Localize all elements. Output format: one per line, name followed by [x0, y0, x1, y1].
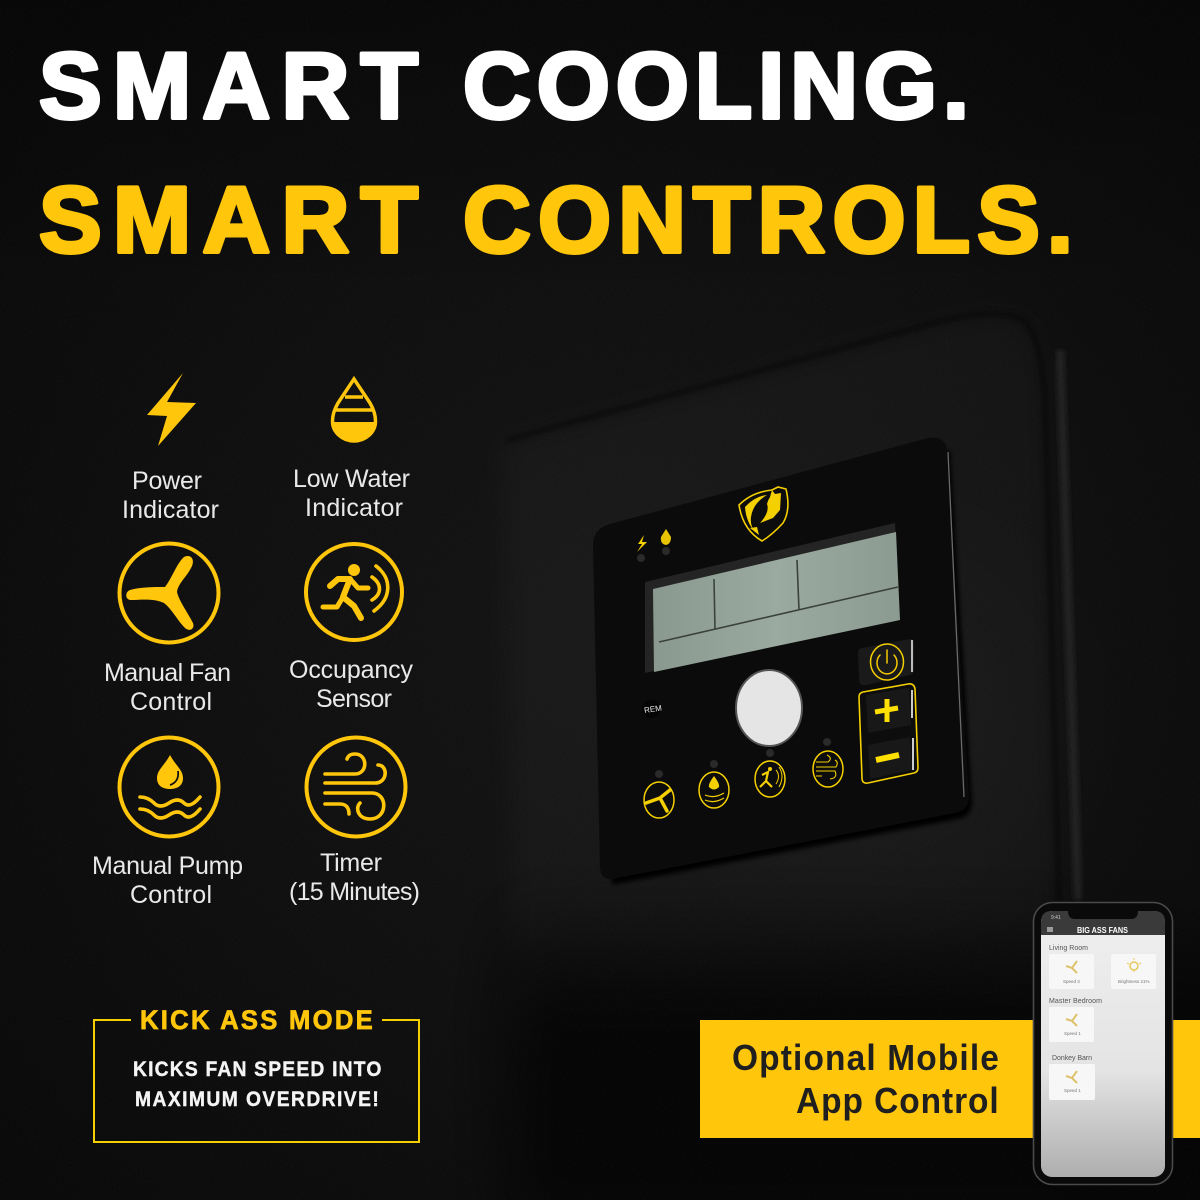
icon: droplet over water — [120, 738, 218, 836]
indicator: small drop — [661, 529, 671, 545]
banner text: Optional Mobile — [732, 1039, 999, 1078]
heading line: smart controls: CONTROLS. — [463, 167, 1073, 272]
tile: living room fan: Speed 3 — [1063, 979, 1080, 984]
icon: fan — [120, 544, 218, 642]
tile: donkey barn fan — [1049, 1064, 1095, 1100]
callout title: KICK ASS MODE — [140, 1004, 373, 1035]
button: occupancy — [755, 761, 785, 797]
label: occupancy sensor — [289, 656, 414, 713]
tile: master bedroom fan — [1049, 1007, 1094, 1042]
label: manual pump control: Control — [130, 881, 212, 909]
tile: brightness: Brightness 21% — [1118, 979, 1150, 984]
phone body — [1034, 902, 1172, 1184]
control panel — [593, 438, 972, 885]
label: manual fan control — [104, 659, 231, 716]
LCD screen — [645, 523, 900, 673]
heading line: smart controls — [39, 167, 1073, 272]
menu icon — [1047, 927, 1053, 932]
app name: BIG ASS FANS — [1077, 926, 1129, 935]
feature: occupancy sensor — [289, 544, 414, 713]
label: occupancy sensor: Sensor — [316, 685, 392, 713]
label: low water indicator: Indicator — [305, 494, 403, 522]
feature: power indicator — [122, 373, 219, 524]
button: wind — [813, 751, 843, 787]
button: power — [858, 639, 914, 685]
label: timer 15 minutes: (15 Minutes) — [289, 878, 420, 906]
icon: wind — [306, 738, 406, 836]
label: manual fan control: Manual Fan — [104, 659, 231, 687]
app screen — [1041, 911, 1165, 1177]
label: timer 15 minutes — [289, 849, 420, 906]
panel shadow — [600, 450, 972, 885]
label: low water indicator — [293, 465, 410, 522]
banner bar — [700, 1020, 1200, 1138]
room labels: Donkey Barn — [1052, 1055, 1092, 1062]
status bar time: 9:41 — [1051, 915, 1061, 921]
button group: plus and minus — [859, 684, 918, 783]
callout body: MAXIMUM OVERDRIVE! — [135, 1088, 379, 1111]
banner text — [732, 1039, 999, 1121]
label: power indicator: Indicator — [122, 496, 219, 524]
banner: optional mobile app control — [700, 1020, 1200, 1138]
heading line: smart cooling: SMART — [39, 33, 418, 138]
heading line: smart cooling — [39, 33, 969, 138]
callout: kick ass mode — [94, 1004, 419, 1142]
phone mockup — [1034, 902, 1172, 1184]
tile: master bedroom fan: Speed 1 — [1064, 1031, 1081, 1036]
label: manual pump control — [92, 852, 243, 909]
heading line: smart controls: SMART — [39, 167, 418, 272]
feature: timer — [289, 738, 420, 906]
app header — [1041, 911, 1165, 935]
label: power indicator — [122, 467, 219, 524]
panel face — [593, 438, 969, 879]
tile: donkey barn fan: Speed 1 — [1064, 1088, 1081, 1093]
remote sensor label: REM — [644, 703, 663, 715]
button: pump — [699, 772, 729, 808]
heading line: smart cooling: COOLING. — [463, 33, 969, 138]
callout body: KICKS FAN SPEED INTO — [133, 1058, 381, 1081]
notch — [1068, 911, 1138, 919]
button: fan — [644, 782, 674, 818]
icon: water drop level — [331, 379, 377, 442]
feature: manual fan control — [104, 544, 231, 716]
icon: running person with sensor waves — [306, 544, 402, 640]
remote sensor label — [642, 700, 663, 718]
callout frame — [94, 1020, 419, 1142]
tile: brightness — [1111, 954, 1156, 989]
feature: low water indicator — [293, 379, 410, 522]
label: timer 15 minutes: Timer — [320, 849, 382, 877]
title — [39, 33, 1073, 272]
icon: lightning bolt — [147, 373, 196, 446]
banner text: App Control — [796, 1082, 999, 1121]
room labels: Master Bedroom — [1049, 998, 1102, 1005]
indicator: small bolt — [637, 535, 647, 552]
tile: living room fan — [1049, 954, 1094, 989]
label: power indicator: Power — [132, 467, 202, 495]
callout body — [133, 1058, 381, 1111]
motion sensor — [736, 670, 802, 746]
label: low water indicator: Low Water — [293, 465, 410, 493]
indicator LEDs — [637, 547, 831, 778]
label: occupancy sensor: Occupancy — [289, 656, 414, 684]
label: manual pump control: Manual Pump — [92, 852, 243, 880]
panel edge highlight — [948, 452, 964, 797]
label: manual fan control: Control — [130, 688, 212, 716]
room labels: Living Room — [1049, 945, 1088, 952]
logo: donkey shield — [739, 487, 788, 541]
feature: manual pump control — [92, 738, 243, 909]
room labels — [1049, 945, 1102, 1062]
